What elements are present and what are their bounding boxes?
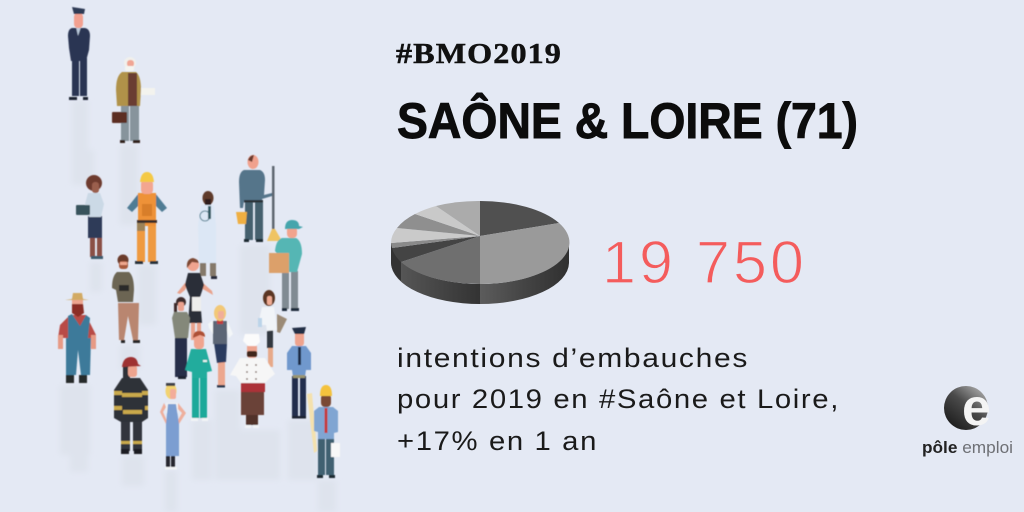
title: SAÔNE & LOIRE (71) <box>397 92 858 149</box>
people illustration <box>58 7 340 478</box>
figure: pilot <box>68 7 90 100</box>
figure: delivery man with box <box>269 220 303 311</box>
description text: +17% en 1 an <box>397 426 598 456</box>
figure: maid <box>177 258 213 340</box>
description text <box>397 343 840 456</box>
figure: police officer <box>287 327 311 418</box>
figure: nurse in teal scrubs <box>185 331 212 421</box>
figure: doctor <box>198 191 217 279</box>
figure: ranger woman <box>172 297 190 379</box>
figure: construction worker <box>127 172 167 264</box>
figure: chef <box>230 334 275 428</box>
pie slices <box>391 201 569 284</box>
figure: old man with briefcase <box>112 57 155 143</box>
key figure: 19 750 <box>602 229 807 296</box>
figure: photographer <box>112 254 140 343</box>
logo: pôle emploi <box>922 379 1013 457</box>
figure: woman in blue apron <box>160 383 186 470</box>
logo wordmark: pôle emploi <box>922 438 1013 457</box>
logo sphere <box>944 386 988 430</box>
reflections under the figures <box>60 100 336 512</box>
pie side wall <box>391 243 569 304</box>
logo letter e: e <box>962 379 991 437</box>
figure: farmer <box>58 293 96 383</box>
figure: flight attendant <box>208 305 233 388</box>
hashtag heading: #BMO2019 <box>396 38 562 70</box>
figure: janitor with mop <box>236 155 282 242</box>
3D pie chart <box>391 201 569 304</box>
description text: pour 2019 en #Saône et Loire, <box>397 384 840 414</box>
description text: intentions d’embauches <box>397 343 749 373</box>
figure: engineer with plan and clipboard <box>307 385 340 478</box>
figure: woman on phone with tablet <box>76 175 104 259</box>
figure: woman with white shirt and folder <box>258 290 287 367</box>
figure: firefighter <box>114 357 148 454</box>
